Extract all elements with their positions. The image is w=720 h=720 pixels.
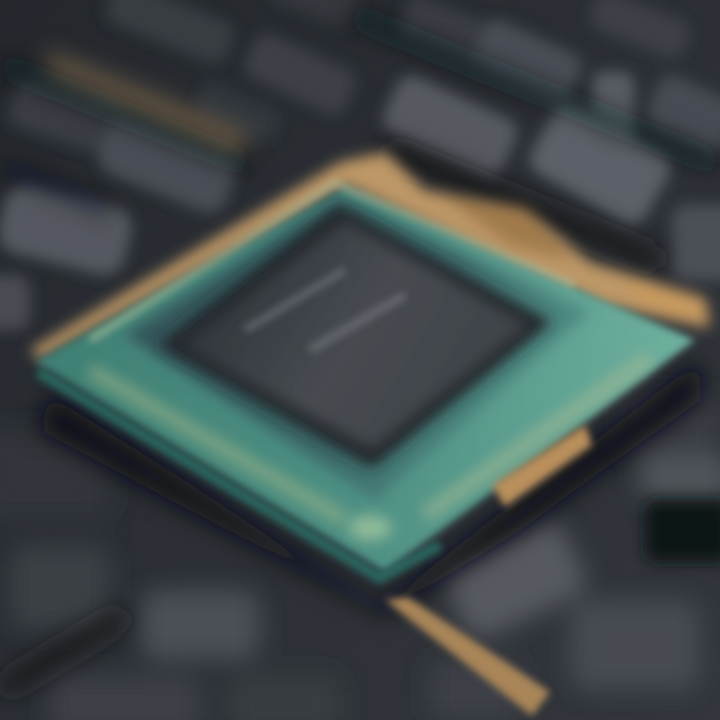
chip shadow [40,360,700,615]
keyboard keys: upper area [0,0,720,330]
dark green edge: front rim [38,372,440,578]
copper frame: back of chip [30,152,710,360]
light highlight: board corner [348,515,392,541]
processor die: dark centre [158,205,552,468]
copper strip: right connector on board edge [492,425,592,507]
die label: blurred engraving lines [245,270,405,350]
cream trace: lower left edge [90,370,345,520]
cream trace: upper left edge [90,183,575,340]
keyboard keys: lower area [0,395,720,720]
chip board: green substrate [35,183,695,578]
inner board: dark teal field around the die [125,195,590,500]
key shadow: right edge block [645,500,720,562]
copper strip: upper left connector [45,50,250,155]
cream trace: lower right edge [425,358,650,515]
copper strip: bottom connector [385,597,550,716]
